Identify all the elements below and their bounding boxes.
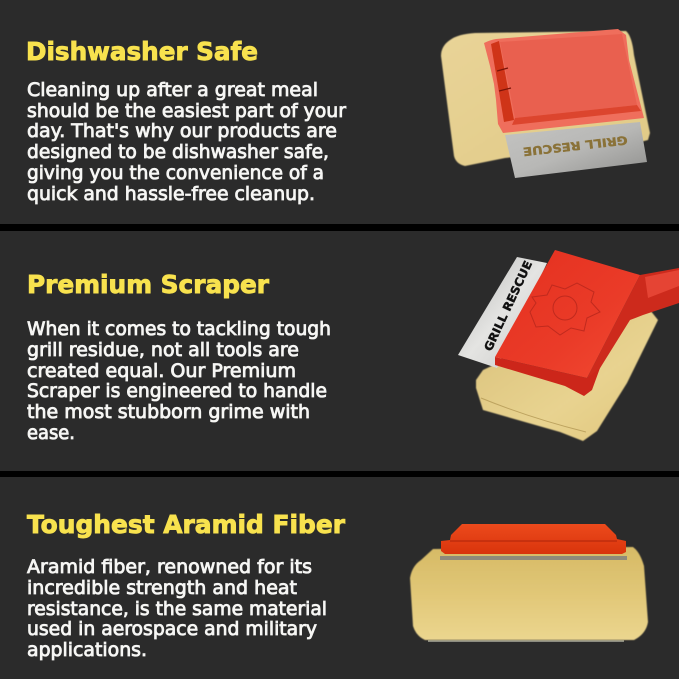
icon: scraper with pad, top view: GRILL RESCUE [522,133,628,159]
text block: premium scraper description: Scraper is engineered to handle [27,380,327,402]
text block: aramid fiber description: resistance, is the same material [27,598,327,620]
text block: aramid fiber description: applications. [27,639,147,661]
panel: dishwasher safe [26,29,650,205]
text block: premium scraper description [27,318,331,444]
text block: dishwasher safe description [27,79,346,205]
text block: dishwasher safe description: giving you the convenience of a [27,162,324,184]
panel: premium scraper [27,250,679,444]
text block: dishwasher safe description: quick and hassle-free cleanup. [27,183,315,205]
panel: toughest aramid fiber [27,510,648,661]
icon: embossed firefighter badge [530,283,600,335]
text block: dishwasher safe description: day. That's why our products are [27,120,337,142]
text block: aramid fiber description [27,556,327,661]
text block: premium scraper description: When it comes to tackling tough [27,318,331,340]
icon: scraper with handle and pad [458,250,679,441]
text block: premium scraper description: the most stubborn grime with [27,401,310,423]
text block: premium scraper description: created equal. Our Premium [27,360,296,382]
text block: premium scraper description: grill residue, not all tools are [27,339,299,361]
text block: dishwasher safe description: should be the easiest part of your [27,100,346,122]
text block: dishwasher safe description: Cleaning up after a great meal [27,79,318,101]
heading: premium scraper: Premium Scraper [27,270,270,299]
text block: aramid fiber description: incredible strength and heat [27,577,297,599]
icon: scraper with handle and pad: GRILL RESCUE [481,258,535,353]
heading: toughest aramid fiber: Toughest Aramid Fiber [27,510,346,539]
text block: premium scraper description: ease. [27,422,75,444]
text block: aramid fiber description: used in aerospace and military [27,618,317,640]
text block: dishwasher safe description: designed to be dishwasher safe, [27,141,329,163]
text block: aramid fiber description: Aramid fiber, renowned for its [27,556,312,578]
heading: dishwasher safe: Dishwasher Safe [26,37,258,66]
icon: scraper with pad, top view [441,29,650,178]
icon: scraper with pad, side view [410,524,648,642]
